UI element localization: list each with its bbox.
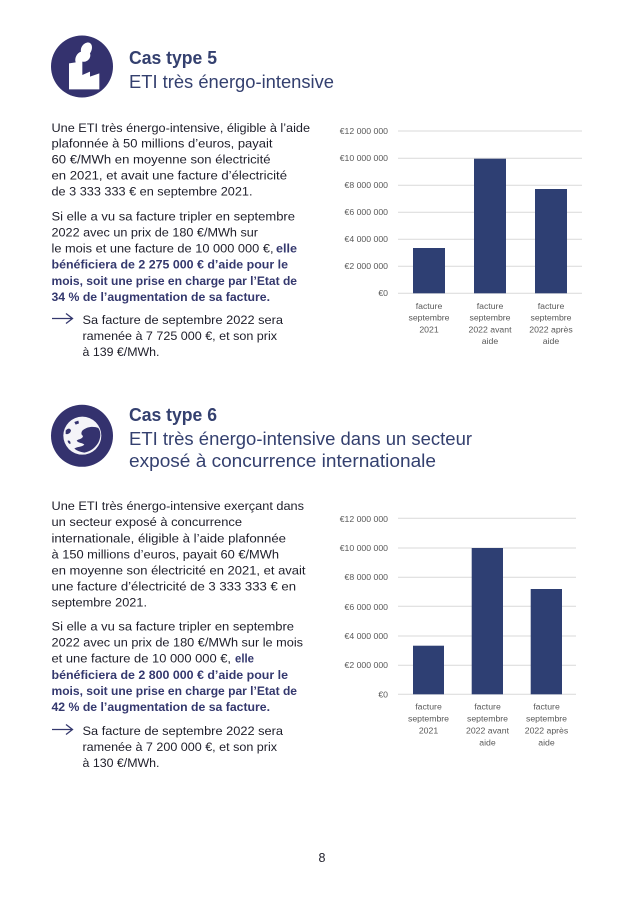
bar chart: cas type 5: septembre xyxy=(530,313,572,323)
text block: aide: 2022 avec un prix de 180 €/MWh sur xyxy=(52,226,258,240)
text block: description: un secteur exposé à concurrence xyxy=(52,515,242,529)
text block: description: une facture d’électricité de 3 333 333 € en xyxy=(52,580,296,594)
bar chart: cas type 5: €6 000 000 xyxy=(345,207,388,217)
bar chart: cas type 5: septembre xyxy=(408,313,450,323)
bar chart: cas type 6: €4 000 000 xyxy=(345,631,388,641)
bar chart: cas type 6: €8 000 000 xyxy=(345,572,388,582)
bar chart: cas type 5: €4 000 000 xyxy=(345,234,388,244)
text block: résultat xyxy=(82,313,283,359)
heading: cas type 6: exposé à concurrence internationale xyxy=(129,451,436,471)
text block: aide: Si elle a vu sa facture tripler en septembre xyxy=(52,620,294,634)
text block: aide: bénéficiera de 2 800 000 € d’aide pour le xyxy=(52,668,288,682)
text block: aide xyxy=(52,210,297,304)
text block: aide: elle xyxy=(276,242,297,256)
bar chart: cas type 6: facture xyxy=(474,702,501,712)
bar chart: cas type 6: 2021 xyxy=(419,726,438,736)
bar chart: cas type 5: aide xyxy=(543,336,559,346)
text block: description: à 150 millions d’euros, payait 60 €/MWh xyxy=(52,547,279,561)
bar chart: cas type 5 xyxy=(340,126,582,346)
heading: cas type 6 xyxy=(129,405,472,471)
bar chart: cas type 5: septembre xyxy=(469,313,511,323)
text block: résultat: à 139 €/MWh. xyxy=(82,345,160,359)
arrow xyxy=(52,314,72,324)
heading: cas type 5: ETI très énergo-intensive xyxy=(129,72,334,92)
bar chart: cas type 5: 2022 après xyxy=(529,324,573,334)
bar chart: cas type 6: septembre xyxy=(408,714,449,724)
text block: description xyxy=(52,121,310,198)
text block: résultat: ramenée à 7 200 000 €, et son prix xyxy=(82,740,278,754)
bar chart: cas type 5: €0 xyxy=(378,288,388,298)
bar chart: cas type 5: 2021 xyxy=(419,324,439,334)
text block: aide: mois, soit une prise en charge par l’Etat de xyxy=(52,684,297,698)
bar chart: cas type 6: €12 000 000 xyxy=(340,514,388,524)
icon: globe xyxy=(51,405,113,467)
text block: description: internationale, éligible à l’aide plafonnée xyxy=(52,531,286,545)
bar chart: cas type 6: aide xyxy=(538,738,555,748)
bar chart: cas type 6: 2022 avant xyxy=(466,726,510,736)
panel: cas type 5 xyxy=(51,36,582,359)
text block: description xyxy=(52,499,306,610)
bar chart: cas type 6: septembre xyxy=(526,714,567,724)
bar chart: cas type 6: facture xyxy=(533,702,560,712)
bar chart: cas type 6: €6 000 000 xyxy=(345,602,388,612)
text block: description: plafonnée à 50 millions d’euros, payait xyxy=(52,137,273,151)
bar chart: cas type 6: €0 xyxy=(378,690,388,700)
text block: aide: et une facture de 10 000 000 €, xyxy=(52,652,231,666)
bar chart: cas type 5: facture xyxy=(416,301,442,311)
icon: factory xyxy=(51,36,113,98)
bar chart: cas type 6: €2 000 000 xyxy=(345,660,388,670)
bar chart: cas type 6: septembre xyxy=(467,714,508,724)
panel: cas type 6 xyxy=(51,405,576,770)
bar chart: cas type 6: aide xyxy=(479,738,496,748)
text block: résultat: ramenée à 7 725 000 €, et son prix xyxy=(82,329,278,343)
bar chart: cas type 5: €12 000 000 xyxy=(340,126,388,136)
page number: 8 xyxy=(319,851,326,865)
bar chart: cas type 6: €10 000 000 xyxy=(340,543,388,553)
bar chart: cas type 5: facture xyxy=(538,301,564,311)
text block: description: 60 €/MWh en moyenne son électricité xyxy=(52,152,271,166)
text block: résultat: à 130 €/MWh. xyxy=(82,756,160,770)
heading: cas type 5: Cas type 5 xyxy=(129,48,217,68)
bar chart: cas type 5: €10 000 000 xyxy=(340,153,388,163)
bar chart: cas type 6: facture xyxy=(415,702,442,712)
text block: résultat: Sa facture de septembre 2022 sera xyxy=(82,724,283,738)
bar chart: cas type 5: facture xyxy=(477,301,503,311)
text block: aide xyxy=(52,620,303,714)
text block: aide: bénéficiera de 2 275 000 € d’aide pour le xyxy=(52,258,288,272)
text block: description: en moyenne son électricité en 2021, et avait xyxy=(52,564,306,578)
bar chart: cas type 5: aide xyxy=(482,336,498,346)
text block: aide: 34 % de l’augmentation de sa facture. xyxy=(52,290,270,304)
text block: aide: Si elle a vu sa facture tripler en septembre xyxy=(52,210,295,224)
bar chart: cas type 5: 2022 avant xyxy=(468,324,512,334)
text block: résultat xyxy=(82,724,283,770)
text block: résultat: Sa facture de septembre 2022 sera xyxy=(82,313,283,327)
text block: description: de 3 333 333 € en septembre 2021. xyxy=(52,184,252,198)
heading: cas type 6: ETI très énergo-intensive dans un secteur xyxy=(129,429,472,449)
text block: aide: 42 % de l’augmentation de sa facture. xyxy=(52,700,270,714)
text block: aide: 2022 avec un prix de 180 €/MWh sur le mois xyxy=(52,636,303,650)
heading: cas type 5 xyxy=(129,48,334,92)
bar chart: cas type 5: €8 000 000 xyxy=(345,180,388,190)
text block: description: septembre 2021. xyxy=(52,596,147,610)
text block: description: en 2021, et avait une facture d’électricité xyxy=(52,168,287,182)
text block: aide: elle xyxy=(235,652,254,666)
heading: cas type 6: Cas type 6 xyxy=(129,405,217,425)
text block: description: Une ETI très énergo-intensive, éligible à l’aide xyxy=(52,121,310,135)
bar chart: cas type 5: €2 000 000 xyxy=(345,261,388,271)
bar chart: cas type 6: 2022 après xyxy=(525,726,569,736)
text block: description: Une ETI très énergo-intensive exerçant dans xyxy=(52,499,304,513)
text block: aide: le mois et une facture de 10 000 000 €, xyxy=(52,242,274,256)
arrow xyxy=(52,724,72,734)
bar chart: cas type 6 xyxy=(340,514,576,748)
text block: aide: mois, soit une prise en charge par l’Etat de xyxy=(52,274,297,288)
